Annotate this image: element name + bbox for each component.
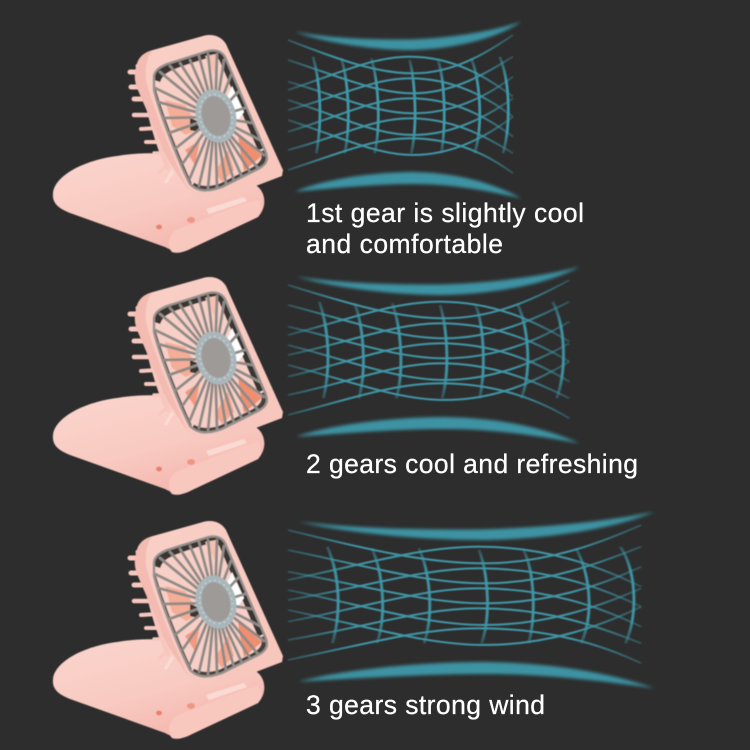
panel: gear 1 (53, 22, 584, 259)
text: gear 2 description: 2 gears cool and refreshing (306, 449, 638, 479)
icon: pink fan gear 1 (53, 35, 283, 253)
text: gear 1 description: and comfortable (306, 229, 503, 259)
chart: airflow gear 3 (288, 512, 654, 688)
chart: airflow gear 1 (288, 22, 521, 198)
icon: pink fan gear 3 (53, 521, 283, 739)
text: gear 1 description (306, 198, 584, 259)
text: gear 1 description: 1st gear is slightly cool (306, 198, 584, 228)
text: gear 3 description: 3 gears strong wind (306, 690, 545, 720)
icon: pink fan gear 2 (53, 277, 283, 495)
panel: gear 3 (53, 512, 654, 739)
chart: airflow gear 2 (288, 267, 580, 443)
panel: gear 2 (53, 267, 638, 495)
